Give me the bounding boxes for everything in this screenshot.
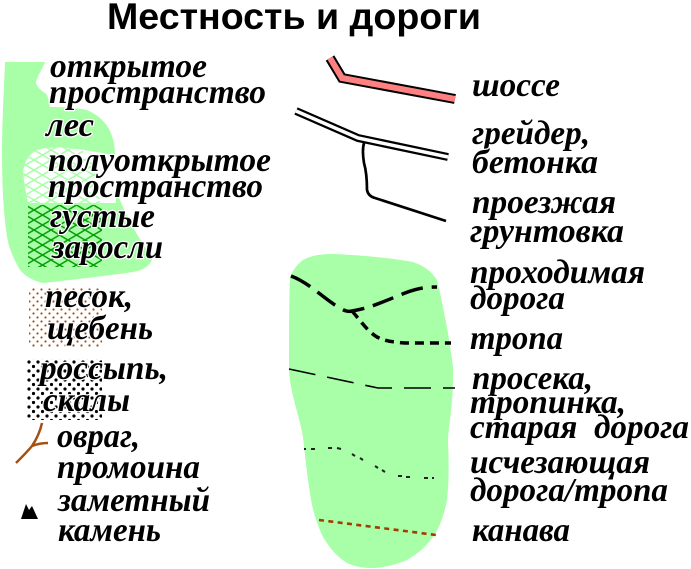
labels: left column: пространство bbox=[49, 74, 266, 111]
labels: left column: густые bbox=[50, 198, 155, 235]
labels: right column: бетонка bbox=[472, 144, 598, 181]
labels: left column: заросли bbox=[51, 229, 163, 266]
labels: left column: песок, bbox=[45, 278, 133, 315]
area: map background bbox=[289, 254, 453, 568]
labels: left column: открытое bbox=[50, 48, 207, 85]
icon: notable stone bbox=[21, 504, 38, 519]
icon: ravine bbox=[16, 423, 48, 463]
labels: right column: исчезающая bbox=[470, 444, 650, 481]
icon: clearing or path bbox=[289, 369, 455, 388]
labels: right column: проезжая bbox=[472, 184, 616, 221]
labels: left column: промоина bbox=[57, 449, 200, 486]
labels: left column: скалы bbox=[43, 382, 130, 419]
labels: left column: лес bbox=[44, 107, 94, 144]
labels: right column: проходимая bbox=[470, 254, 645, 291]
labels: right column: старая дорога bbox=[470, 409, 689, 446]
labels: right column: грейдер, bbox=[472, 115, 590, 152]
labels: left column bbox=[37, 48, 271, 549]
labels: left column: пространство bbox=[48, 168, 263, 205]
labels: right column: просека, bbox=[472, 360, 593, 397]
area: open space and forest bbox=[2, 62, 152, 283]
labels: right column: тропа bbox=[470, 320, 563, 357]
labels: left column: камень bbox=[58, 512, 161, 549]
labels: left column: овраг, bbox=[57, 418, 140, 455]
icon: dirt road bbox=[363, 143, 446, 221]
labels: right column bbox=[470, 67, 689, 549]
area: dense thicket hatch bbox=[28, 205, 102, 267]
icon: highway bbox=[330, 58, 455, 99]
labels: right column: дорога bbox=[470, 280, 565, 317]
labels: right column: канава bbox=[472, 512, 570, 549]
labels: left column: щебень bbox=[47, 310, 153, 347]
area: semi-open hatch bbox=[23, 147, 116, 203]
labels: left column: полуоткрытое bbox=[48, 142, 271, 179]
icon: ditch bbox=[319, 520, 436, 535]
labels: right column: шоссе bbox=[472, 67, 560, 104]
icon: fading road bbox=[304, 448, 434, 478]
area: scree and rocks dots bbox=[26, 359, 102, 420]
area: sand and gravel dots bbox=[29, 287, 102, 348]
icon: trail bbox=[352, 311, 451, 343]
labels: right column: тропинка, bbox=[470, 384, 626, 421]
panel: road samples bbox=[289, 58, 455, 568]
panel: terrain swatches bbox=[2, 62, 152, 519]
labels: left column: заметный bbox=[57, 482, 210, 519]
labels: right column: дорога/тропа bbox=[470, 472, 668, 509]
icon: graded road bbox=[296, 111, 448, 157]
labels: right column: грунтовка bbox=[470, 213, 624, 250]
icon: passable road bbox=[291, 276, 437, 311]
labels: left column: россыпь, bbox=[37, 350, 168, 387]
